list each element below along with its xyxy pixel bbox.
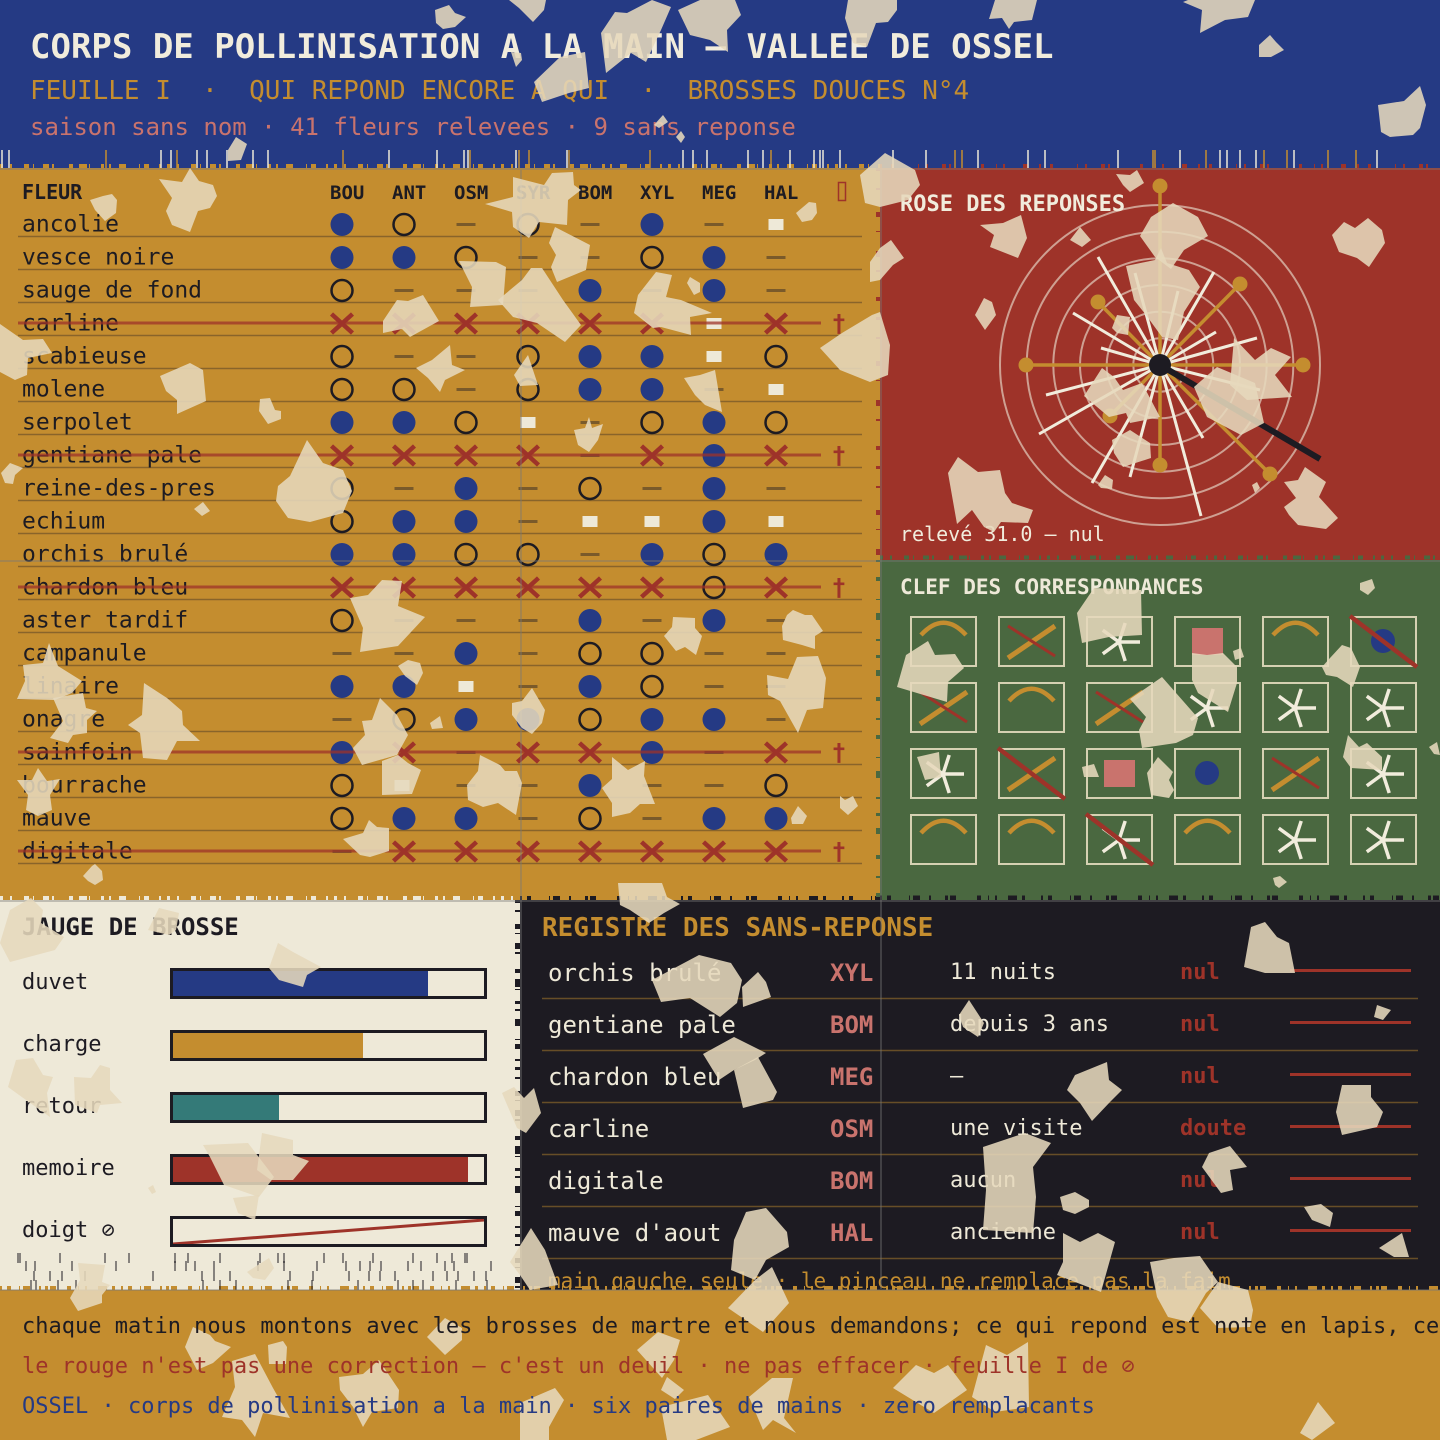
row: sainfoin (struck)	[18, 738, 862, 766]
row: sainfoin (struck): †	[832, 738, 846, 766]
register row: orchis brule: XYL	[830, 959, 873, 987]
row: orchis brule: orchis brulé	[22, 542, 188, 568]
panel: rose des reponses	[900, 178, 1320, 546]
rose black brush hand	[1160, 365, 1320, 459]
panel: rose background	[880, 168, 1440, 560]
row: molene	[18, 376, 862, 402]
register row: carline	[542, 1115, 1418, 1154]
register row: carline: doute	[1180, 1116, 1246, 1141]
register row: mauve d'aout: ancienne	[950, 1220, 1056, 1245]
subtitle: FEUILLE I · QUI REPOND ENCORE A QUI · BROSSES DOUCES N°4	[30, 76, 969, 106]
register row: chardon bleu: chardon bleu	[548, 1063, 721, 1091]
panel: gauge background	[0, 900, 520, 1290]
row: reine-des-pres: reine-des-pres	[22, 476, 216, 502]
row: serpolet: serpolet	[22, 410, 133, 436]
gauge: retour	[22, 1094, 486, 1122]
register row: chardon bleu	[542, 1063, 1418, 1102]
footer line: blue: OSSEL · corps de pollinisation a la main · six paires de mains · zero remplacants	[22, 1394, 1095, 1419]
row: aster tardif: aster tardif	[22, 608, 188, 634]
gauge: doigt: doigt ⊘	[22, 1218, 115, 1243]
row: orchis brule	[18, 542, 862, 568]
row: mauve: mauve	[22, 806, 91, 832]
register footnote: main gauche seule · le pinceau ne remplace pas la faim	[548, 1269, 1231, 1293]
row: echium	[18, 508, 862, 534]
panel: jauge de brosse	[22, 913, 486, 1246]
table column headers: HAL	[764, 182, 798, 204]
row: ancolie: ancolie	[22, 212, 119, 238]
rose reading label: relevé 31.0 — nul	[900, 522, 1105, 546]
register row: digitale: nul	[1180, 1168, 1220, 1193]
flower response table	[18, 180, 862, 866]
gauge: charge: charge	[22, 1032, 101, 1057]
panel: clef des correspondances	[900, 575, 1417, 865]
register row: mauve d'aout: HAL	[830, 1219, 873, 1247]
row: sauge de fond	[18, 278, 862, 304]
key row 2	[911, 683, 1416, 732]
register row: carline: carline	[548, 1115, 649, 1143]
key row 1	[911, 616, 1417, 667]
gauge: duvet	[22, 970, 486, 998]
row: aster tardif	[18, 608, 862, 634]
key row 3	[911, 748, 1416, 799]
panel: flower table background	[0, 168, 880, 900]
register row: digitale: digitale	[548, 1167, 664, 1195]
row: digitale (struck)	[18, 838, 862, 866]
row: molene: molene	[22, 376, 105, 402]
row: mauve	[18, 806, 862, 832]
row: vesce noire	[18, 244, 862, 270]
register row: chardon bleu: MEG	[830, 1063, 873, 1091]
gauge: doigt	[22, 1218, 486, 1246]
rose white response rays	[1039, 257, 1260, 516]
panel: register background	[520, 900, 1440, 1290]
row: campanule	[18, 640, 862, 666]
register row: mauve d'aout	[542, 1219, 1418, 1258]
row: chardon bleu (struck): †	[832, 574, 846, 602]
footer cover band	[0, 1290, 1440, 1440]
table column headers: SYR	[516, 182, 551, 204]
register row: digitale: BOM	[830, 1167, 873, 1195]
row: onagre	[18, 706, 862, 732]
row: bourrache: bourrache	[22, 772, 147, 798]
row: linaire	[18, 674, 862, 700]
register row: digitale: aucun	[950, 1168, 1016, 1193]
row: reine-des-pres	[18, 476, 862, 502]
table column headers: ANT	[392, 182, 426, 204]
register row: carline: OSM	[830, 1115, 873, 1143]
register row: mauve d'aout: nul	[1180, 1220, 1220, 1245]
row: carline (struck)	[18, 310, 862, 338]
row: echium: echium	[22, 508, 105, 534]
rose heading: ROSE DES REPONSES	[900, 192, 1125, 217]
table column headers: OSM	[454, 182, 488, 204]
rose ochre spokes with end dots	[1018, 178, 1310, 482]
gauge: memoire: memoire	[22, 1156, 115, 1181]
register row: digitale	[542, 1167, 1418, 1206]
row: gentiane pale (struck)	[18, 442, 862, 470]
gauge: charge	[22, 1032, 486, 1060]
row: digitale (struck): digitale	[22, 838, 133, 864]
footer line: black: chaque matin nous montons avec les brosses de martre et nous demandons; ce qui repond est note en lapis, ce	[22, 1314, 1439, 1339]
table column headers: BOU	[330, 182, 364, 204]
header text block	[30, 27, 1054, 141]
table column headers: FLEUR	[22, 180, 83, 204]
row: scabieuse: scabieuse	[22, 344, 147, 370]
panel: key background	[880, 560, 1440, 900]
table column headers	[22, 180, 846, 204]
row: bourrache	[18, 772, 862, 798]
key heading: CLEF DES CORRESPONDANCES	[900, 575, 1203, 599]
register row: gentiane pale: BOM	[830, 1011, 873, 1039]
register row: orchis brule: orchis brulé	[548, 959, 721, 987]
row: onagre: onagre	[22, 706, 105, 732]
table column headers: MEG	[702, 182, 736, 204]
row: carline (struck): carline	[22, 310, 119, 336]
row: ancolie	[18, 212, 862, 238]
register row: gentiane pale: gentiane pale	[548, 1011, 736, 1039]
row: sauge de fond: sauge de fond	[22, 278, 202, 304]
panel: header background	[0, 0, 1440, 168]
row: sainfoin (struck): sainfoin	[22, 740, 133, 766]
gauge heading: JAUGE DE BROSSE	[22, 913, 239, 941]
footer line: red: le rouge n'est pas une correction — c'est un deuil · ne pas effacer · feuille I de ⊘	[22, 1354, 1135, 1379]
row: serpolet	[18, 410, 862, 436]
register row: chardon bleu: —	[950, 1064, 964, 1089]
register row: mauve d'aout: mauve d'aout	[548, 1219, 721, 1247]
season line: saison sans nom · 41 fleurs relevees · 9 sans reponse	[30, 113, 796, 141]
register row: chardon bleu: nul	[1180, 1064, 1220, 1089]
rose centre hub	[1149, 354, 1171, 376]
ragged torn edges between panels	[0, 150, 1440, 1290]
register row: orchis brule: nul	[1180, 960, 1220, 985]
table column headers: BOM	[578, 182, 612, 204]
row: chardon bleu (struck): chardon bleu	[22, 574, 188, 600]
register row: carline: une visite	[950, 1116, 1082, 1141]
row: digitale (struck): †	[832, 838, 846, 866]
gauge: duvet: duvet	[22, 970, 88, 995]
panel seam lines	[0, 168, 1440, 1291]
row: chardon bleu (struck)	[18, 574, 862, 602]
title: CORPS DE POLLINISATION A LA MAIN — VALLEE DE OSSEL	[30, 27, 1054, 67]
register row: gentiane pale	[542, 1011, 1418, 1050]
register row: gentiane pale: depuis 3 ans	[950, 1012, 1109, 1037]
gauge: memoire	[22, 1156, 486, 1184]
footer text block	[22, 1314, 1439, 1419]
row: campanule: campanule	[22, 640, 147, 666]
row: scabieuse	[18, 344, 862, 370]
register row: gentiane pale: nul	[1180, 1012, 1220, 1037]
panel: registre des sans-reponse	[542, 913, 1418, 1293]
rose concentric rings	[1000, 205, 1320, 525]
row: carline (struck): †	[832, 310, 846, 338]
row: vesce noire: vesce noire	[22, 244, 174, 270]
key row 4	[911, 814, 1416, 865]
row: linaire: linaire	[22, 674, 119, 700]
row: gentiane pale (struck): †	[832, 442, 846, 470]
panel: footer background	[0, 1290, 1440, 1440]
register heading: REGISTRE DES SANS-REPONSE	[542, 913, 933, 943]
register row: orchis brule: 11 nuits	[950, 960, 1056, 985]
table column headers: XYL	[640, 182, 674, 204]
row: gentiane pale (struck): gentiane pale	[22, 442, 202, 468]
register row: orchis brule	[542, 959, 1418, 998]
gauge: retour: retour	[22, 1094, 101, 1119]
